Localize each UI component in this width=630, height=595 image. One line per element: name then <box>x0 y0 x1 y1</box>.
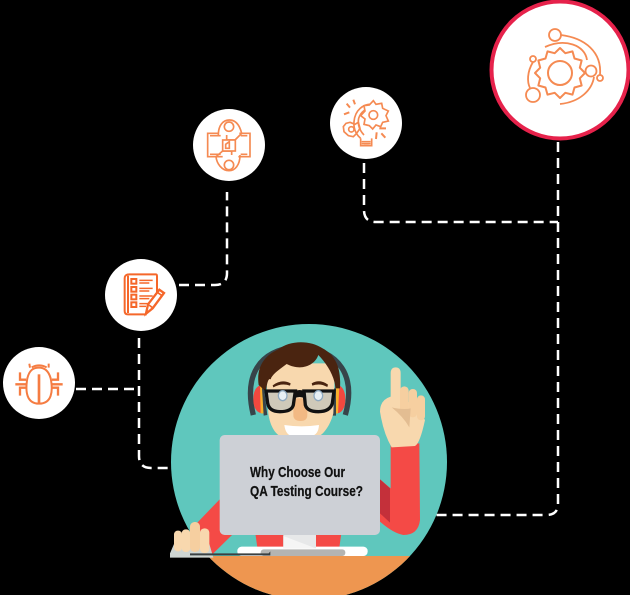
glasses <box>266 390 334 412</box>
orbit arcs and nodes <box>526 29 603 104</box>
bulb glyph <box>343 100 388 146</box>
hair <box>258 342 340 392</box>
icon: lightbulb with gears <box>330 87 402 159</box>
orange desk <box>210 556 410 595</box>
bug glyph <box>15 364 63 404</box>
monitor stand <box>283 533 316 548</box>
smile <box>284 425 319 436</box>
teamwork badge <box>193 109 265 181</box>
monitor base <box>237 547 368 556</box>
bulb badge <box>330 87 402 159</box>
monitor screen <box>220 435 380 535</box>
keyboard <box>261 549 345 556</box>
stand highlight <box>283 536 316 548</box>
monitor heading text: QA Testing Course? <box>250 483 363 500</box>
right arm sleeve <box>380 443 420 535</box>
icon: teamwork <box>193 109 265 181</box>
connector: bug to checklist line <box>76 388 139 390</box>
left hand tablet base <box>170 544 213 558</box>
monitor heading text: Why Choose Our <box>250 464 345 481</box>
tablet edge <box>190 551 270 555</box>
gear outline <box>535 48 585 98</box>
ear cups <box>253 385 345 416</box>
gear hub <box>548 61 572 85</box>
left hand <box>174 522 209 553</box>
eyebrows <box>273 381 328 387</box>
checklist badge <box>105 259 177 331</box>
connector: checklist to teamwork icon <box>179 192 227 285</box>
tester figure <box>170 342 425 558</box>
checklist glyph <box>125 274 164 314</box>
connector: bulb icon to trunk line <box>364 163 558 222</box>
gear badge with red ring <box>492 2 628 138</box>
headphone band <box>250 347 349 415</box>
teal background circle <box>171 324 447 595</box>
bug badge <box>3 347 75 419</box>
main illustration: QA tester at monitor <box>170 324 450 595</box>
icon: checklist <box>105 259 177 331</box>
connector: gear icon to main circle <box>435 142 558 515</box>
left arm <box>196 498 232 554</box>
icon: bug <box>3 347 75 419</box>
nose <box>293 398 307 421</box>
teamwork glyph <box>208 120 250 171</box>
sleeve shadow <box>380 479 390 523</box>
face <box>266 363 335 437</box>
connector: checklist to main circle <box>139 338 171 468</box>
right hand pointing up <box>380 367 425 447</box>
icon: gear process <box>492 2 628 138</box>
torso below monitor <box>255 533 341 547</box>
